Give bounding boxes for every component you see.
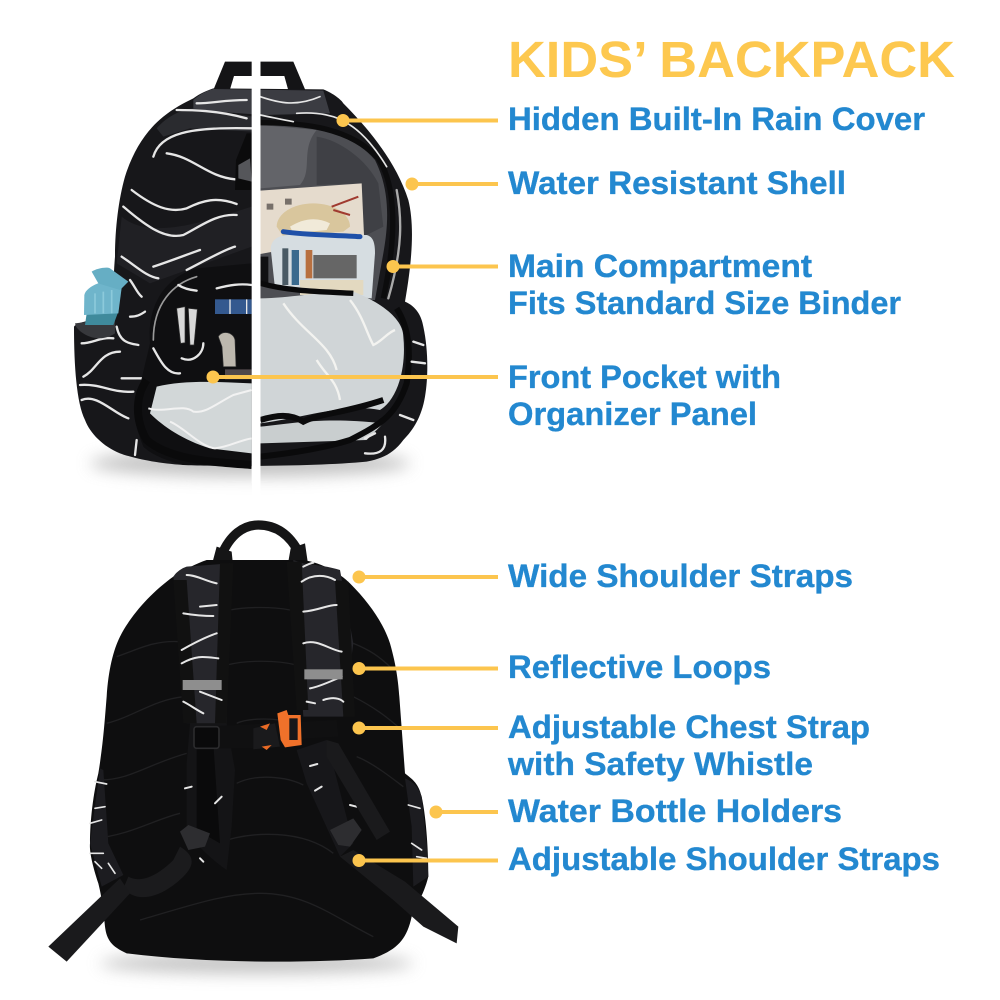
bottle holder mesh rim [75, 318, 115, 338]
orange safety whistle [277, 710, 302, 747]
white divider strip [252, 50, 260, 483]
ground shadow [90, 450, 410, 477]
callout: water bottle holders: Water Bottle Holders [508, 793, 842, 829]
callout: hidden rain cover [336, 101, 925, 137]
chest strap with whistle [194, 710, 338, 750]
callout: main compartment: Main Compartment [508, 248, 812, 284]
top grey panel [193, 89, 330, 115]
notebook [260, 183, 364, 254]
backpack body [90, 560, 428, 962]
side pocket left [90, 768, 123, 887]
strap adjusters [180, 825, 210, 850]
lower left strap [123, 847, 192, 897]
callout: reflective loops: Reflective Loops [508, 649, 771, 685]
side wave right [260, 97, 320, 103]
callout: chest strap: with Safety Whistle [507, 746, 813, 782]
top handle [213, 62, 306, 92]
blue organizer tag [215, 299, 252, 314]
hanging strap end [327, 740, 390, 840]
callout: front pocket: Organizer Panel [508, 396, 757, 432]
water bottle [84, 268, 128, 325]
compartment rim [260, 123, 393, 298]
right lower pattern [365, 342, 425, 454]
callout: wide shoulder straps [352, 558, 853, 594]
side pocket right [405, 778, 428, 887]
mesh pocket edge [225, 369, 252, 379]
backpack body [74, 88, 427, 466]
front backpack photo [74, 50, 427, 483]
callout: adjustable shoulder straps: Adjustable Shoulder Straps [508, 841, 940, 877]
side buckle [235, 133, 252, 190]
callout: main compartment: Fits Standard Size Binder [508, 285, 901, 321]
callout: hidden rain cover: Hidden Built-In Rain Cover [508, 101, 925, 137]
pocket rim left [138, 380, 252, 465]
back backpack photo [48, 525, 458, 973]
callout: chest strap: Adjustable Chest Strap [508, 709, 870, 745]
pencil box [271, 232, 375, 298]
lower lining left [150, 382, 252, 453]
lower right strap [340, 850, 458, 943]
front lining right [260, 292, 404, 423]
ground shadow [100, 953, 413, 973]
lining rim [260, 283, 353, 293]
wave pattern left [80, 100, 252, 455]
callout: front pocket [206, 359, 781, 432]
callout: front pocket: Front Pocket with [508, 359, 781, 395]
zipper pulls [177, 307, 236, 367]
callout: reflective loops [352, 649, 771, 685]
callout: chest strap [352, 709, 870, 782]
main compartment interior [260, 125, 387, 300]
right shoulder strap [287, 560, 357, 857]
top handle [213, 525, 308, 562]
left shoulder strap [173, 563, 235, 870]
front flap shading [117, 207, 252, 283]
foam padding ribs [95, 607, 403, 937]
callout: wide shoulder straps: Wide Shoulder Straps [508, 558, 853, 594]
white divider line [252, 55, 260, 495]
callout: water resistant shell: Water Resistant Shell [508, 165, 846, 201]
front pocket left [135, 263, 252, 465]
title: KIDS’ BACKPACK [508, 31, 955, 88]
callout: main compartment [386, 248, 901, 321]
